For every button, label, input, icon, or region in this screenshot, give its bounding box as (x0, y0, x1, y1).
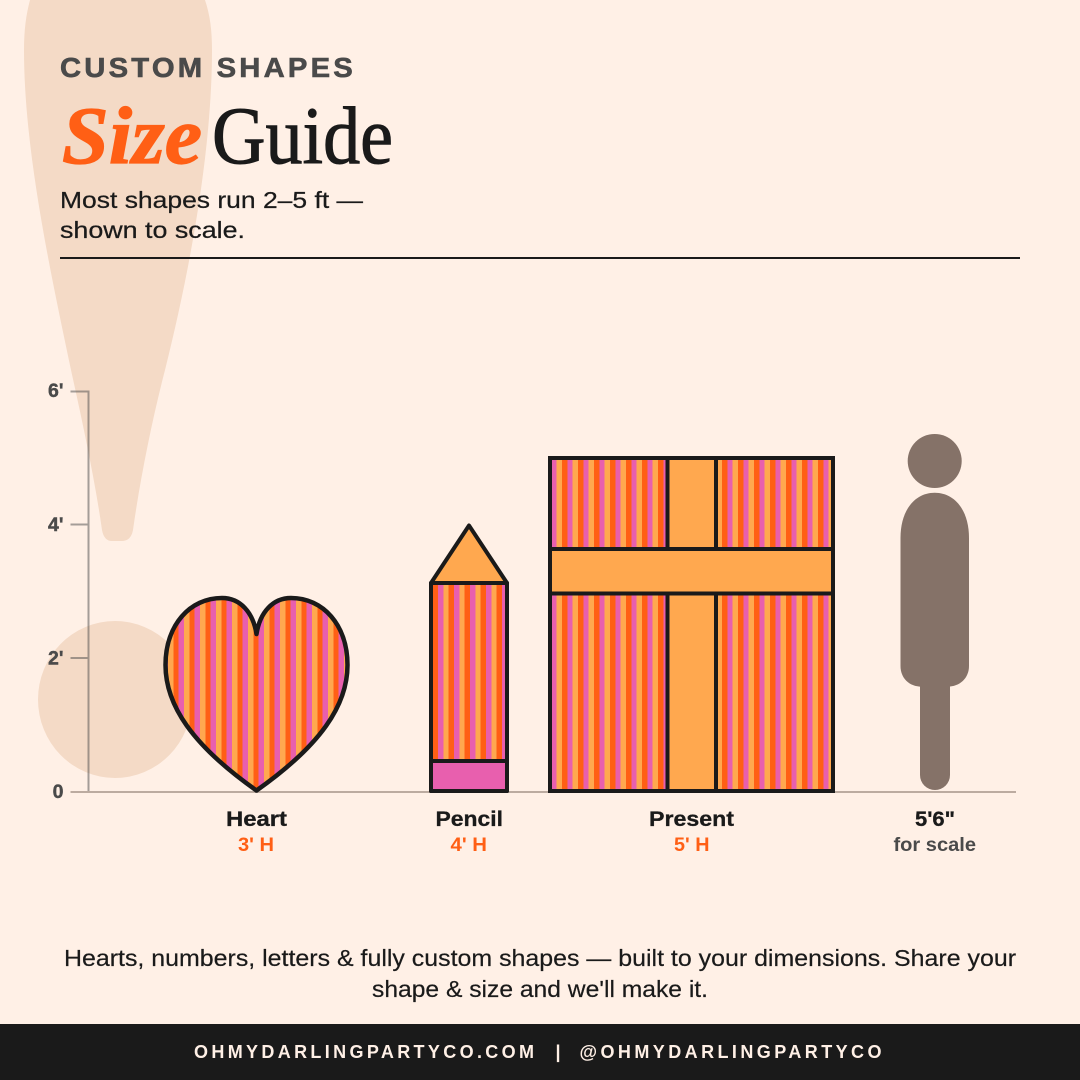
present label: 5' H (674, 835, 710, 856)
title: Size (62, 90, 202, 181)
pencil label: Pencil (436, 808, 503, 831)
eyebrow heading: CUSTOM SHAPES (60, 52, 356, 83)
axis: 2' (48, 648, 64, 670)
footer bar: | (556, 1042, 561, 1062)
header (60, 52, 393, 243)
footer note: shape & size and we'll make it. (372, 976, 708, 1002)
title: Guide (212, 90, 393, 181)
heart label (226, 808, 287, 856)
footer note: Hearts, numbers, letters & fully custom shapes — built to your dimensions. Share your (64, 945, 1016, 971)
subtitle: shown to scale. (60, 217, 245, 243)
present shape (550, 458, 833, 791)
pencil label (436, 808, 503, 856)
pencil shape (431, 526, 507, 791)
axis: 0 (53, 781, 64, 803)
present label (649, 808, 734, 856)
axis: 6' (48, 380, 64, 402)
height chart (48, 380, 1016, 856)
axis (48, 380, 1016, 803)
background exclamation mark (24, 0, 212, 778)
person label (894, 808, 976, 856)
present label: Present (649, 808, 734, 831)
person silhouette (900, 434, 969, 790)
person label: for scale (894, 835, 976, 856)
footer bar (0, 1024, 1080, 1080)
pencil label: 4' H (450, 835, 487, 856)
footer bar: @OHMYDARLINGPARTYCO (580, 1042, 882, 1062)
axis: 4' (48, 514, 64, 536)
person label: 5'6" (915, 808, 955, 831)
heart label: Heart (226, 808, 287, 831)
title (62, 90, 393, 181)
footer bar: OHMYDARLINGPARTYCO.COM (194, 1042, 534, 1062)
heart shape (166, 598, 348, 790)
subtitle (60, 187, 364, 243)
subtitle: Most shapes run 2–5 ft — (60, 187, 364, 213)
heart label: 3' H (238, 835, 274, 856)
footer note (64, 945, 1016, 1002)
